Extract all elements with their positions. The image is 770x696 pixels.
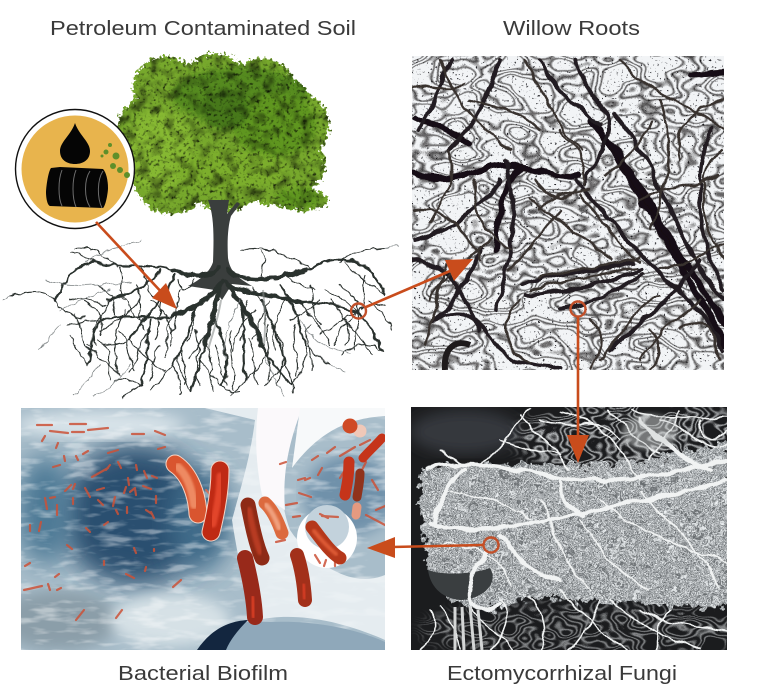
arrow: badge to roots — [96, 222, 177, 309]
icon: oil drop — [60, 123, 90, 164]
root body with fungal mantle — [420, 440, 735, 609]
large bacterium 4 — [265, 503, 282, 533]
illustration: tree with roots — [3, 53, 398, 398]
shading clouds — [0, 411, 395, 650]
upper right bacteria — [345, 438, 382, 515]
curved pale root at bottom left — [445, 343, 470, 370]
large bacterium 3 — [248, 505, 262, 558]
icon: oil barrel — [46, 167, 108, 208]
callout ring on fungi — [484, 538, 498, 552]
panel: willow roots photo — [412, 56, 724, 370]
panel: ectomycorrhizal fungi photo — [410, 407, 735, 650]
arrow: willow roots to fungi — [567, 302, 589, 463]
large bacterium 1 — [175, 464, 198, 514]
title: Petroleum Contaminated Soil: Petroleum Contaminated Soil — [50, 17, 356, 40]
title: Willow Roots: Willow Roots — [503, 17, 640, 40]
arrow: fungi to biofilm — [367, 537, 498, 558]
tree crown — [117, 53, 330, 214]
small bacteria — [24, 424, 385, 620]
sparse hyphae outside the root — [411, 407, 727, 650]
arrow: tree root to willow roots — [351, 259, 473, 318]
pale highlight on central roots — [208, 290, 265, 350]
thick root strands — [412, 60, 724, 368]
title: Bacterial Biofilm: Bacterial Biofilm — [118, 662, 288, 685]
panel: bacterial biofilm illustration — [0, 408, 395, 650]
white fibrous streaks — [21, 408, 385, 650]
large bacterium 5 — [245, 558, 255, 617]
bright mass at top — [622, 414, 678, 450]
large bacterium 2 — [211, 470, 220, 532]
callout ring on willow root — [570, 302, 586, 316]
spherical bacteria — [342, 418, 366, 438]
speckle texture — [412, 56, 724, 370]
large bacterium 7 — [312, 527, 340, 558]
circular pit — [297, 508, 357, 568]
leaves overlapping the badge — [100, 143, 130, 178]
badge outer ring — [16, 110, 134, 228]
base root bundle — [455, 606, 482, 650]
bottom dark opening — [226, 622, 385, 650]
white membrane bands — [205, 408, 385, 640]
callout ring on tree root — [351, 304, 366, 318]
root system — [3, 240, 398, 398]
badge yellow disc — [22, 116, 128, 222]
thick white strands — [420, 408, 727, 650]
trunk — [188, 200, 252, 300]
title: Ectomycorrhizal Fungi: Ectomycorrhizal Fungi — [447, 662, 677, 685]
fine root veins — [412, 56, 724, 370]
icon: oil drop and barrel badge — [16, 110, 134, 228]
dark tip lobe — [428, 568, 493, 600]
large bacterium 6 — [297, 555, 305, 600]
grey lobe top left — [410, 410, 520, 454]
